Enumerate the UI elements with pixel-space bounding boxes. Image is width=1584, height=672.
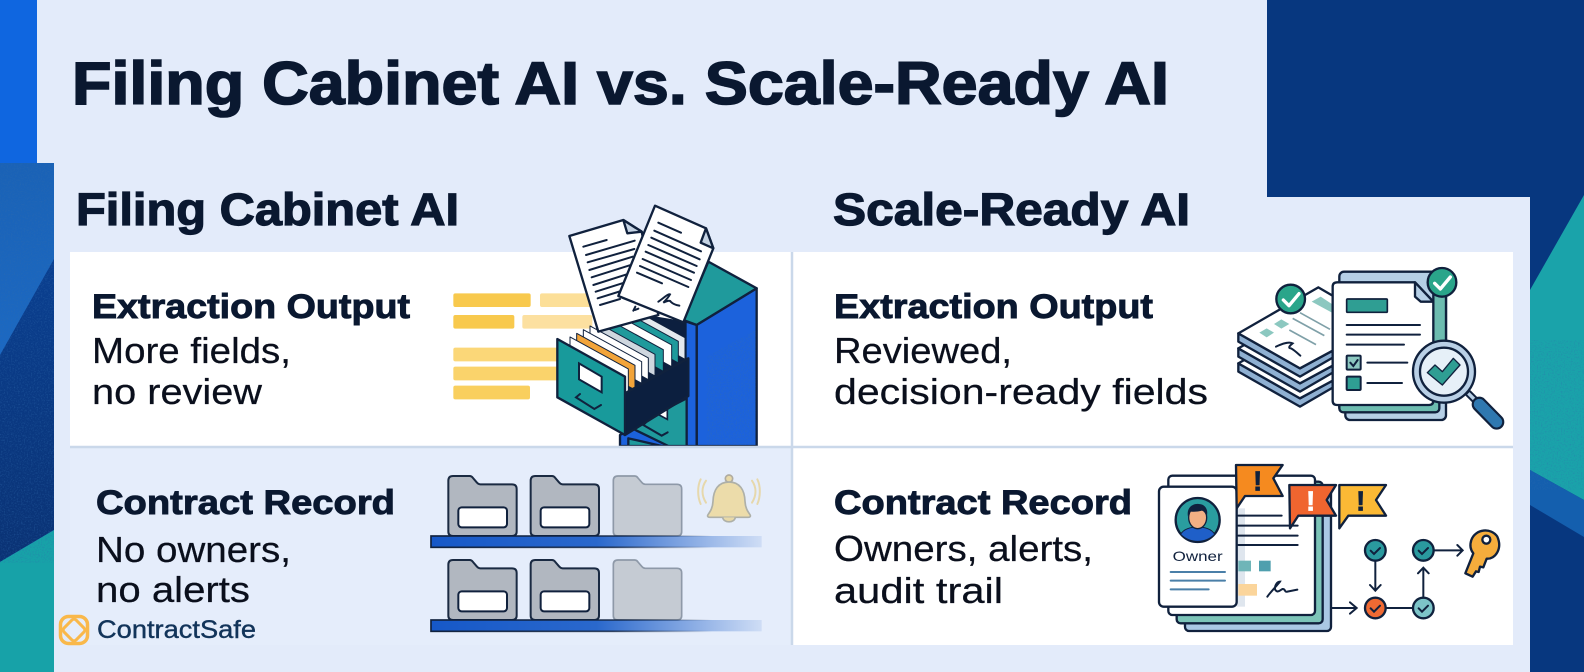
card: contract record, scale-ready: [793, 448, 1513, 645]
card text: contract record: Contract Record: [96, 484, 395, 522]
alert flags: !: [1356, 485, 1365, 516]
alert flags: !: [1306, 485, 1315, 516]
dividers: [70, 252, 1513, 645]
card text: contract record with owners: [834, 484, 1132, 611]
check badges: [1276, 268, 1456, 313]
logo mark: [60, 616, 88, 644]
card text: contract record with owners: Owners, alerts,: [834, 528, 1093, 569]
panel: scale-ready AI column: [793, 184, 1513, 645]
icon: owner card, alert flags and audit flow: [1159, 465, 1499, 631]
card text: extraction output reviewed: [834, 288, 1208, 412]
card text: extraction output: More fields,: [92, 330, 291, 371]
panel: filing cabinet AI column: [70, 184, 792, 645]
card: extraction output, filing cabinet: [70, 206, 792, 446]
owner card: Owner: [1173, 548, 1223, 564]
main title: Filing Cabinet AI vs. Scale-Ready AI: [72, 50, 1169, 117]
layered contract: [1168, 476, 1331, 631]
icon: key: [1465, 530, 1499, 577]
contract stack: [1238, 287, 1340, 407]
card text: extraction output reviewed: Reviewed,: [834, 330, 1012, 371]
shelf two: [431, 560, 762, 631]
alert flags: !: [1253, 465, 1262, 496]
heading: Scale-Ready AI: Scale-Ready AI: [833, 184, 1190, 235]
icon: muted bell: [698, 475, 760, 522]
card text: contract record with owners: audit trail: [834, 570, 1003, 611]
icon: document stack with magnifier and check badges: [1238, 268, 1497, 422]
logo: ContractSafe: ContractSafe: [97, 616, 256, 644]
alert flags: [1236, 465, 1386, 528]
review document: [1333, 272, 1446, 420]
card text: contract record: No owners,: [96, 529, 291, 570]
icon: filing cabinet with papers and yellow field bars: [453, 206, 757, 446]
magnifier: [1413, 341, 1497, 422]
card text: extraction output reviewed: decision-ready fields: [834, 371, 1208, 412]
card text: extraction output reviewed: Extraction Output: [834, 288, 1153, 326]
owner card: [1159, 487, 1237, 607]
audit trail flow: [1332, 540, 1463, 618]
card text: extraction output: Extraction Output: [92, 288, 410, 326]
card text: contract record: no alerts: [96, 569, 250, 610]
card text: extraction output: [92, 288, 410, 412]
heading: Filing Cabinet AI: Filing Cabinet AI: [76, 184, 459, 235]
card: extraction output, scale-ready: [793, 252, 1513, 446]
icon: shelves of folders with muted bell: [431, 475, 762, 631]
card text: contract record with owners: Contract Record: [834, 484, 1132, 522]
shelf one: [431, 476, 762, 547]
card text: extraction output: no review: [92, 371, 263, 412]
card: contract record, filing cabinet: [70, 448, 792, 645]
card text: contract record: [96, 484, 395, 610]
